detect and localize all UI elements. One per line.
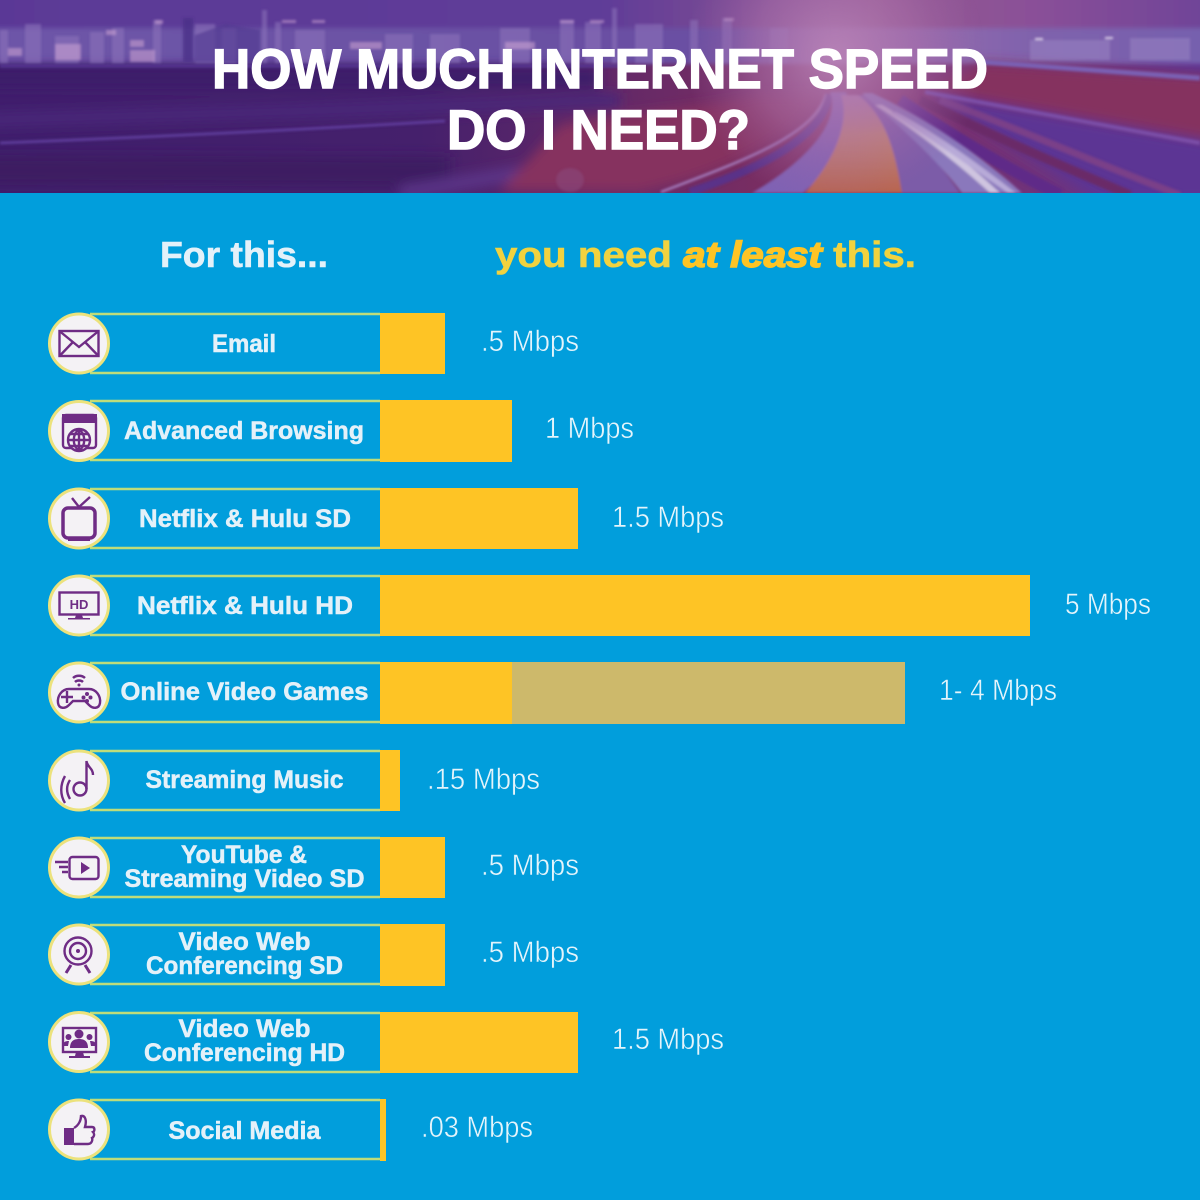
- row: youtube and streaming video sd: .5 Mbps: [481, 849, 579, 882]
- row: video web conferencing hd: [50, 1012, 724, 1073]
- column heading: you need at least this: you need at least this.: [495, 234, 916, 275]
- header banner: city and light trails: [0, 0, 1200, 200]
- row: advanced browsing: 1 Mbps: [545, 412, 634, 445]
- row: youtube and streaming video sd: Streaming Video SD: [124, 865, 364, 893]
- city skyline: [0, 8, 1190, 63]
- row: streaming music: Streaming Music: [146, 766, 344, 794]
- icon: hd monitor: HD: [70, 597, 88, 612]
- title: HOW MUCH INTERNET SPEED: [212, 37, 988, 100]
- row: netflix and hulu hd: [50, 575, 1151, 636]
- icon: television: [63, 497, 95, 541]
- icon: hd monitor: [60, 592, 98, 620]
- icon: thumbs up: [64, 1116, 94, 1145]
- title: DO I NEED?: [447, 98, 750, 161]
- icon: webcam: [64, 938, 92, 973]
- row: online video games: 1- 4 Mbps: [939, 674, 1057, 707]
- row: streaming music: [50, 750, 540, 811]
- row: video web conferencing sd: .5 Mbps: [481, 936, 579, 969]
- row: video web conferencing hd: Conferencing HD: [144, 1039, 345, 1067]
- row: video web conferencing hd: Video Web: [178, 1015, 310, 1043]
- row: video web conferencing sd: Conferencing SD: [146, 952, 343, 980]
- row: advanced browsing: [50, 400, 634, 462]
- row: netflix and hulu hd: 5 Mbps: [1065, 588, 1151, 621]
- row: netflix and hulu sd: Netflix & Hulu SD: [139, 505, 351, 533]
- column heading: for this: For this...: [160, 234, 328, 275]
- row: social media: Social Media: [168, 1117, 322, 1145]
- row: video web conferencing hd: 1.5 Mbps: [612, 1023, 724, 1056]
- icon: video player: [55, 857, 98, 879]
- row: youtube and streaming video sd: [50, 837, 579, 898]
- icon: envelope: [60, 331, 98, 356]
- row: advanced browsing: Advanced Browsing: [124, 417, 364, 445]
- row: email: .5 Mbps: [481, 325, 579, 358]
- row: social media: [50, 1099, 533, 1161]
- row: online video games: [50, 662, 1057, 724]
- row: video web conferencing sd: Video Web: [178, 928, 310, 956]
- icon: music note: [61, 761, 93, 803]
- icon: browser globe: [62, 414, 97, 451]
- row: video web conferencing sd: [50, 924, 579, 986]
- title: [212, 37, 988, 161]
- row: netflix and hulu sd: [50, 488, 724, 549]
- row: online video games: Online Video Games: [120, 678, 368, 706]
- row: netflix and hulu sd: 1.5 Mbps: [612, 501, 724, 534]
- icon: video conference monitor: [63, 1028, 96, 1058]
- row: email: Email: [212, 330, 276, 358]
- row: streaming music: .15 Mbps: [427, 763, 540, 796]
- row: youtube and streaming video sd: YouTube &: [181, 841, 307, 869]
- icon: game controller: [58, 676, 100, 708]
- row: social media: .03 Mbps: [421, 1111, 533, 1144]
- row: netflix and hulu hd: Netflix & Hulu HD: [137, 592, 353, 620]
- row: email: [50, 313, 579, 374]
